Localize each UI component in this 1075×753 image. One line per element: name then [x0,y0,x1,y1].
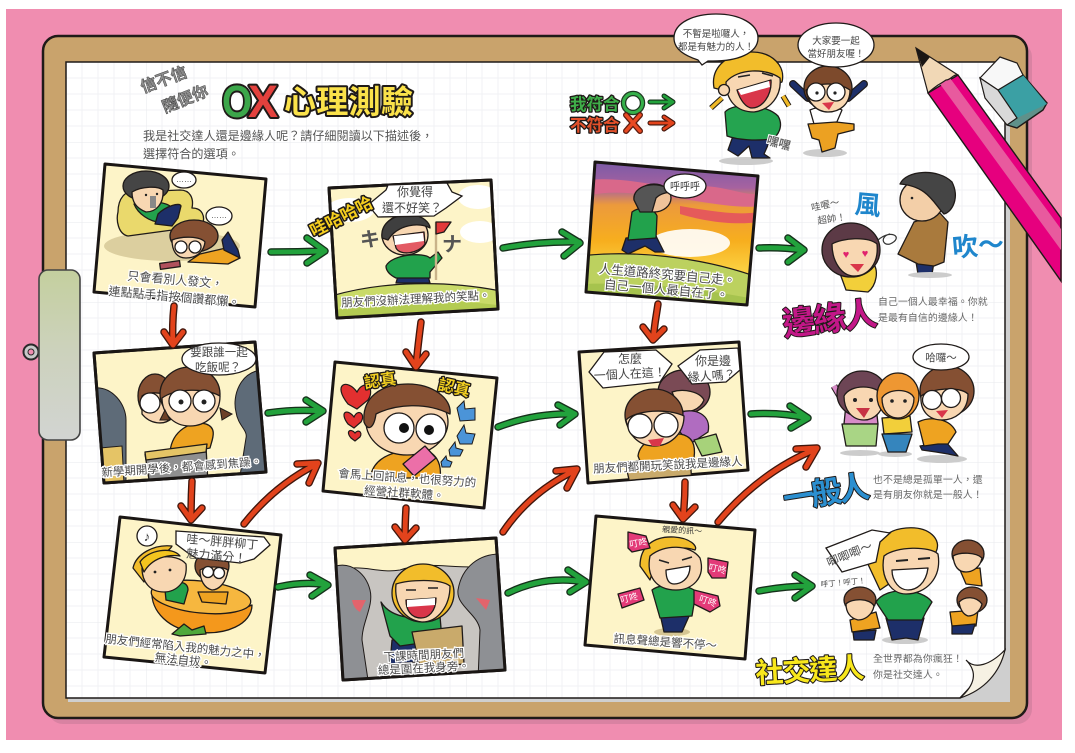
yellow girl [133,546,188,604]
result 1 description: 是最有自信的邊緣人！ [878,311,978,324]
serious: 認真 [363,370,397,392]
title main: 心理測驗 [284,84,413,120]
speech: 魅力滿分！ [186,545,247,566]
orange hair girl [877,373,919,452]
panel 7: popular [335,538,505,680]
title OX: O [222,76,252,127]
caption: 朋友們沒辦法理解我的笑點。 [341,288,491,310]
swoon text: 哇喔～ [810,196,841,214]
ding tags: 叮咚 [619,590,639,605]
caption [108,268,241,310]
caption: 下課時間朋友們 [383,646,464,664]
intro text [143,128,433,161]
hehe text: 嘿嘿 [765,133,792,153]
caption: 新學期開學後，都會感到焦躁。 [101,454,263,480]
boy: キ [360,229,380,251]
result 3 heading: 社交達人 [755,652,865,689]
eraser [980,57,1047,128]
serious: 認真 [437,376,472,400]
legend [570,94,673,135]
panel 4: classroom [94,342,270,490]
bubble [664,174,706,198]
bubble: 呼呼呼 [670,181,700,193]
cheer text: 呼丁！呼丁！ [820,575,866,589]
speech: 還不好笑？ [382,200,442,215]
ding tags: 叮咚 [708,561,728,576]
sofa [117,190,204,236]
result 2 description: 也不是總是孤單一人，還 [873,473,983,486]
result 1 description: 自己一個人最幸福。你就 [878,295,988,308]
caption: 自己一個人最自在了。 [603,278,729,302]
ding tags: 叮咚 [629,536,648,550]
speech [368,183,462,217]
speech right: 緣人嗎？ [687,367,736,385]
result 2 description [873,473,983,501]
caption: 朋友們都開玩笑說我是邊緣人 [593,454,743,476]
caption [598,261,737,302]
panel 1: sofa: …… [176,175,192,184]
ding tags [618,532,728,612]
bubble: 哈囉～ [925,351,957,364]
small text: 親愛的訊～ [662,524,702,536]
caption: 總是圍在我身旁。 [377,659,470,677]
title tagline: 隨便你 [159,81,211,117]
caption [377,646,470,677]
top characters [674,14,874,165]
title tagline [138,63,211,117]
red arrows [164,304,817,540]
dots bubbles [172,172,196,188]
bubble left: 不暫是啦囉人， [683,28,749,40]
caption: 訊息聲總是響不停～ [613,631,718,653]
title OX [222,76,278,127]
result 1 description [878,295,988,324]
caption: 經營社群軟體。 [364,483,445,503]
walking boy [622,184,674,254]
speech left: 一個人在這！ [593,364,666,383]
result 3 description: 全世界都為你瘋狂！ [873,652,963,665]
panel 1: sofa: …… [211,211,227,220]
paper curl [960,650,1005,698]
swoon text: 超帥！ [817,211,847,227]
speech: 要跟誰一起 [190,345,248,359]
pencil [916,48,1061,281]
caption: 朋友們經常陷入我的魅力之中， [105,632,266,662]
caption: 無法自拔。 [154,650,213,670]
shadows [104,231,240,261]
glasses girl [625,389,694,466]
result 2 description: 是有朋友你就是一般人！ [873,488,983,501]
boy [360,215,462,283]
girl [640,537,701,632]
small top girl [952,540,984,586]
bubble right: 大家要一起 [812,35,860,47]
friend behind [138,374,172,423]
caption: 會馬上回訊息，也很努力的 [338,466,477,490]
big girl [866,528,939,640]
speech right: 你是邊 [695,354,731,368]
speech [825,530,890,572]
big face [364,384,450,478]
glasses girl [918,366,974,456]
bubble right [798,23,874,67]
caption: 只會看別人發文， [127,268,224,291]
boy: ナ [442,234,462,256]
girl [381,564,464,668]
yellow hair girl [711,52,789,158]
girl with heart eyes: ♥ [862,248,868,260]
legend yes: 我符合 [570,94,620,114]
panel 8: teased [579,342,748,484]
swirl [878,234,896,244]
speech [182,343,256,375]
hearts [341,384,371,441]
speech [176,531,270,566]
girl lying [160,220,240,269]
wind word: 風 [854,189,882,221]
small girl [195,551,229,604]
swoon text [810,196,847,227]
anxious girl [145,367,232,460]
music note: ♪ [144,529,150,544]
result 2 heading: 一般人 [781,469,872,517]
serious [363,370,472,400]
speech right [678,348,740,385]
small left girl [844,587,880,640]
thumbs [441,401,475,467]
title OX: X [248,76,278,127]
panel 6: orange [104,517,281,673]
panel 5: messaging [323,362,497,508]
panel 1: sofa [94,164,266,310]
panel 9: notifications [585,516,755,659]
striped girl [834,371,887,446]
result 2: three friends [834,344,974,463]
blow word: 吹～ [951,229,1005,263]
speech left [589,350,672,388]
caption: 連點點手指按個讚都懶。 [108,283,241,310]
title [138,63,413,127]
bubble right: 當好朋友喔！ [807,48,865,60]
music note [137,526,157,546]
intro text: 選擇符合的選項。 [143,146,240,161]
laugh text: 哇哈哈哈 [307,193,376,241]
shadows [719,157,773,165]
glasses girl [793,66,864,152]
friend [658,370,722,456]
girl with heart eyes: ♥ [843,249,849,261]
result 3: social star [820,528,987,644]
caption: 人生道路終究要自己走。 [598,261,737,288]
speech: 唧唧唧～ [825,539,874,570]
bubble left [674,14,758,65]
bubble left: 都是有魅力的人！ [678,41,754,53]
panel 2: flag [307,180,505,325]
desk [144,450,208,478]
speech left: 怎麼 [618,351,642,366]
clip holder [24,270,80,440]
result 3 description [873,652,963,681]
result 3 description: 你是社交達人。 [873,668,943,681]
title tagline: 信不信 [138,63,189,97]
intro text: 我是社交達人還是邊緣人呢？請仔細閱讀以下描述後， [143,128,433,143]
grid paper [66,62,1005,698]
speech: 吃飯呢？ [195,360,241,374]
boy on sofa [123,171,181,226]
result 1: outsider scene [810,172,1005,292]
legend no: 不符合 [570,115,620,135]
speech: 哇～胖胖柳丁 [186,531,259,552]
small bottom girl [950,587,987,634]
caption [338,466,477,503]
speech: 你覺得 [397,184,433,199]
ding tags: 叮咚 [698,593,718,609]
fruit [150,576,252,636]
result 1 heading: 邊緣人 [780,295,879,343]
girl with heart eyes [822,223,880,292]
green arrows [268,232,812,598]
man in coat [898,172,955,278]
panel 3: sunset [580,162,760,310]
